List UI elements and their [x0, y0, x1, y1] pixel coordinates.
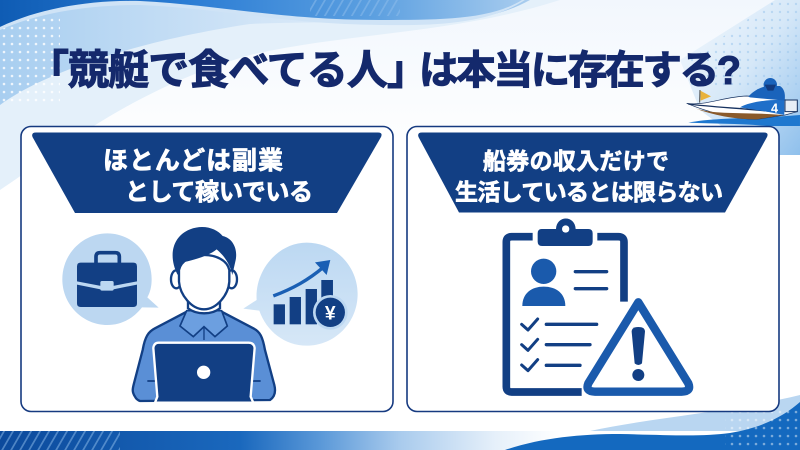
speech bubble: briefcase [62, 233, 159, 325]
speech bubble: chart with yen: ¥ [325, 304, 336, 325]
wake [688, 115, 800, 126]
illustration: person with laptop [62, 227, 358, 403]
illustration: racing boat [687, 78, 800, 126]
icon: clipboard with warning [506, 218, 689, 392]
title: は本当に存在する? [419, 49, 741, 93]
heading: left [32, 132, 382, 213]
heading: left: として稼いでいる [125, 179, 313, 206]
flag [700, 90, 711, 103]
clip [538, 218, 593, 246]
panel: right [407, 126, 779, 412]
clipboard frame [506, 237, 624, 392]
warning triangle [587, 302, 689, 392]
neck and head [188, 295, 220, 313]
hull [687, 96, 797, 119]
person body [133, 312, 275, 401]
heading: right [418, 132, 768, 212]
checklist [522, 319, 538, 371]
heading: right: 生活しているとは限らない [455, 179, 723, 205]
profile [531, 259, 556, 284]
heading: left: ほとんどは副業 [103, 147, 283, 175]
bottom band [0, 395, 800, 450]
title [28, 47, 741, 93]
title: 「競艇で食べてる人」 [28, 47, 428, 93]
panel: left [21, 126, 393, 412]
laptop [153, 343, 255, 403]
illustration: racing boat: 4 [771, 102, 778, 116]
heading: right: 船券の収入だけで [483, 148, 669, 174]
rider [748, 86, 785, 101]
speech bubble: chart with yen [243, 243, 358, 346]
